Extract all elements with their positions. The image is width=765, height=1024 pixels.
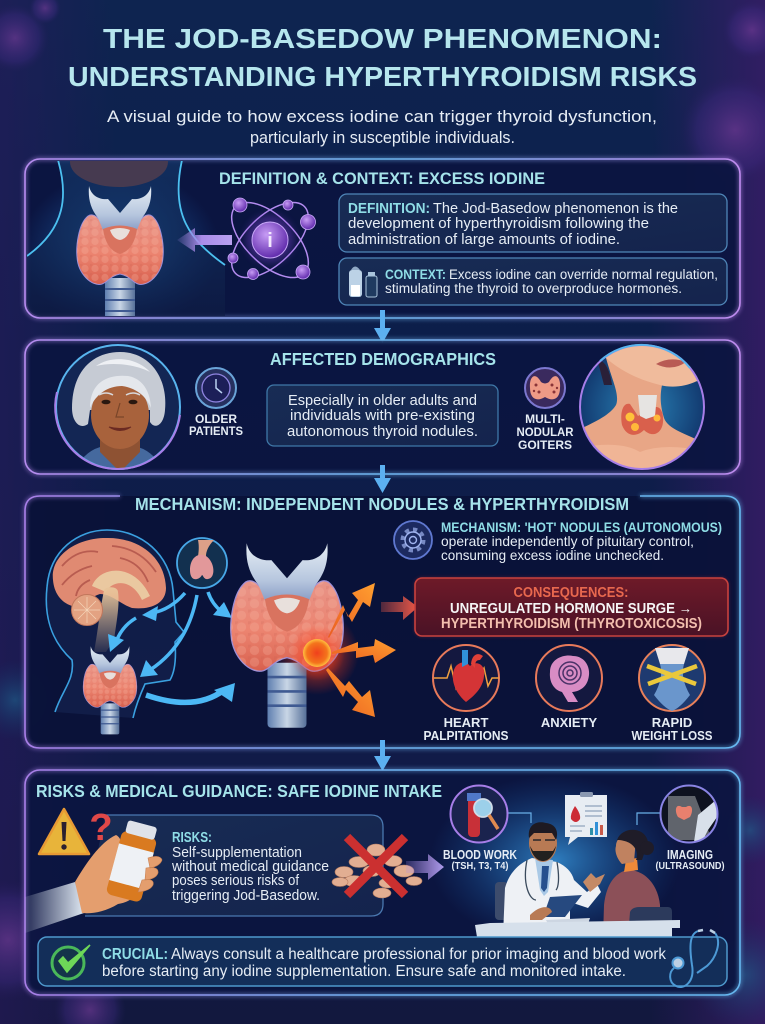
icon: blood work — [450, 786, 531, 842]
panel: mechanism — [25, 494, 740, 748]
text box: risks: without medical guidance — [171, 859, 329, 875]
icon: iodine atom — [219, 189, 321, 291]
panel: affected demographics — [25, 340, 740, 474]
label: rapid weight loss: WEIGHT LOSS — [632, 728, 713, 743]
text block: mechanism: consuming excess iodine unchecked. — [441, 547, 664, 563]
label: anxiety: ANXIETY — [541, 715, 597, 730]
title — [68, 23, 697, 92]
label: heart palpitations: HEART — [444, 715, 488, 730]
label: multinodular goiters: MULTI- — [525, 412, 565, 426]
arrow: definition to demographics — [374, 310, 391, 343]
icon: salt shaker and bottle — [349, 266, 377, 297]
text block: mechanism: operate independently of pituitary control, — [441, 533, 694, 549]
label: blood work — [443, 848, 517, 872]
callout: consequences: CONSEQUENCES: — [514, 585, 628, 601]
subtitle — [107, 107, 657, 147]
text box: definition — [339, 194, 727, 252]
heading: risks and guidance: RISKS & MEDICAL GUIDANCE: SAFE IODINE INTAKE — [36, 781, 442, 801]
text box: risks — [85, 815, 383, 916]
icon: rapid weight loss — [639, 645, 705, 711]
label: imaging: (ULTRASOUND) — [656, 860, 724, 872]
icon: crossed-out pills — [332, 837, 422, 898]
callout: consequences: HYPERTHYROIDISM (THYROTOXICOSIS) — [441, 616, 702, 632]
label: multinodular goiters — [516, 412, 574, 452]
label: rapid weight loss: RAPID — [652, 715, 692, 730]
text block: mechanism: MECHANISM: 'HOT' NODULES (AUTONOMOUS) — [441, 519, 722, 535]
title: THE JOD-BASEDOW PHENOMENON: — [103, 23, 662, 54]
text box: context — [339, 258, 727, 305]
arrows: pituitary signalling — [108, 592, 235, 702]
illustration: head and brain — [46, 530, 184, 718]
text box: definition: development of hyperthyroidism following the — [348, 216, 649, 232]
text box: risks: Self-supplementation — [172, 845, 302, 861]
icon: ultrasound imaging — [637, 786, 722, 842]
illustration: large thyroid with hot nodule — [231, 543, 359, 728]
icon: pituitary gland — [177, 538, 227, 588]
arrow: mechanism to risks — [374, 740, 391, 771]
label: heart palpitations — [424, 715, 509, 743]
text block: mechanism — [441, 519, 722, 563]
icon: multinodular thyroid — [525, 368, 565, 408]
illustration: neck and thyroid — [27, 161, 226, 316]
title: UNDERSTANDING HYPERTHYROIDISM RISKS — [68, 61, 697, 92]
text box: context: stimulating the thyroid to overproduce hormones. — [385, 281, 682, 296]
arrows: hormone surge — [326, 583, 396, 717]
illustration: doctor and patient consultation — [430, 775, 680, 945]
text box: risks: RISKS: — [172, 830, 212, 846]
text box: risks: poses serious risks of — [172, 873, 300, 889]
portrait: older woman — [55, 345, 180, 472]
label: imaging: IMAGING — [667, 848, 713, 862]
icon: question mark: ? — [89, 807, 113, 849]
callout: consequences: UNREGULATED HORMONE SURGE → — [450, 601, 692, 617]
arrow: iodine to thyroid — [177, 228, 232, 252]
heading: mechanism: MECHANISM: INDEPENDENT NODULES & HYPERTHYROIDISM — [135, 494, 629, 514]
callout: consequences — [415, 578, 728, 636]
label: multinodular goiters: NODULAR — [516, 425, 574, 439]
illustration: hand holding supplement bottle — [25, 819, 162, 933]
text box: context: Excess iodine can override normal regulation, — [449, 267, 718, 282]
label: heart palpitations: PALPITATIONS — [424, 728, 509, 743]
label: multinodular goiters: GOITERS — [518, 438, 572, 452]
text box: at-risk groups — [267, 385, 498, 446]
subtitle: particularly in susceptible individuals. — [250, 128, 515, 147]
heading: affected demographics: AFFECTED DEMOGRAPHICS — [270, 349, 496, 369]
text box: context: CONTEXT: — [385, 267, 446, 282]
arrow: to consequences — [381, 596, 418, 620]
arrow: demographics to mechanism — [374, 465, 391, 493]
icon: anxiety — [536, 645, 602, 711]
text box: at-risk groups: Especially in older adults and — [288, 393, 477, 409]
arrow: to testing — [406, 854, 444, 880]
label: older patients: OLDER — [195, 412, 237, 426]
text box: definition: administration of large amounts of iodine. — [348, 232, 620, 248]
callout: crucial: CRUCIAL: — [102, 946, 168, 963]
panel: definition and context — [20, 154, 744, 322]
callout: crucial: Always consult a healthcare professional for prior imaging and blood work — [171, 946, 666, 963]
label: imaging — [656, 848, 724, 872]
icon: green check — [52, 945, 90, 979]
text box: risks: triggering Jod-Basedow. — [172, 888, 320, 904]
text box: definition: The Jod-Basedow phenomenon is the — [433, 201, 678, 217]
icon: heart palpitations — [433, 645, 499, 711]
text box: definition: DEFINITION: — [348, 201, 430, 217]
label: older patients — [189, 412, 243, 438]
label: rapid weight loss — [632, 715, 713, 743]
callout: crucial: before starting any iodine supplementation. Ensure safe and monitored intake. — [102, 963, 626, 980]
icon: clipboard report — [565, 792, 607, 845]
panel: risks and guidance — [25, 770, 740, 995]
icon: iodine atom: i — [267, 230, 273, 252]
icon: gear — [394, 521, 432, 559]
text box: at-risk groups: autonomous thyroid nodules. — [287, 424, 478, 440]
callout: crucial — [38, 937, 727, 986]
heading: definition and context: DEFINITION & CONTEXT: EXCESS IODINE — [219, 170, 545, 188]
icon: clock — [196, 368, 236, 408]
subtitle: A visual guide to how excess iodine can trigger thyroid dysfunction, — [107, 107, 657, 126]
icon: stethoscope — [670, 930, 718, 987]
text box: at-risk groups: individuals with pre-existing — [290, 408, 475, 424]
label: older patients: PATIENTS — [189, 424, 243, 438]
icon: warning sign — [39, 809, 89, 854]
illustration: small thyroid — [83, 646, 137, 734]
label: blood work: BLOOD WORK — [443, 848, 517, 862]
label: blood work: (TSH, T3, T4) — [452, 860, 508, 872]
portrait: neck with goiter — [578, 340, 710, 472]
